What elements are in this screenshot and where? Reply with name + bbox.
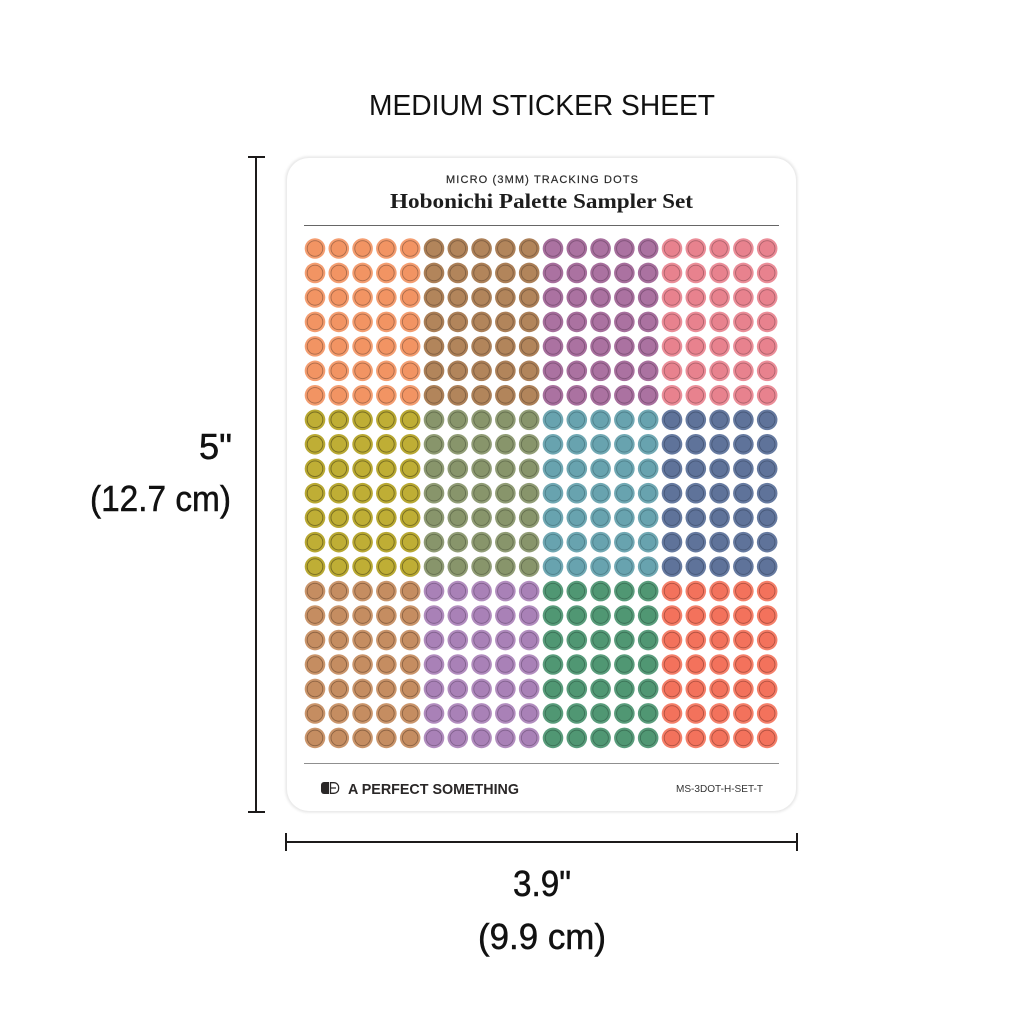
dots: green — [543, 581, 658, 748]
width label: 3.9" — [513, 863, 571, 904]
dots: teal — [543, 410, 658, 577]
panel: sticker sheet — [286, 156, 798, 812]
width label — [478, 863, 606, 957]
dots: lilac — [424, 581, 539, 748]
width label: (9.9 cm) — [478, 916, 606, 957]
sheet subtitle: MICRO (3MM) TRACKING DOTS — [446, 174, 638, 186]
dots: olive — [305, 410, 420, 577]
dots: pink — [662, 238, 777, 406]
heading: medium sticker sheet: MEDIUM STICKER SHEET — [369, 90, 715, 122]
top rule — [304, 225, 779, 226]
icon: brand logo — [321, 782, 339, 794]
bottom rule — [304, 763, 779, 764]
dots: sage — [424, 410, 539, 577]
dot grid — [305, 238, 777, 748]
dots: tan — [305, 581, 420, 748]
sheet title: Hobonichi Palette Sampler Set — [390, 189, 693, 213]
dots: brown — [424, 238, 539, 406]
dots: coral — [662, 581, 777, 748]
dots: navy — [662, 410, 777, 577]
height label: (12.7 cm) — [90, 478, 231, 519]
dots: purple — [543, 238, 658, 406]
brand name: A PERFECT SOMETHING — [348, 781, 519, 798]
product code: MS-3DOT-H-SET-T — [676, 783, 764, 795]
width dimension line — [285, 833, 798, 851]
height dimension line — [248, 156, 265, 813]
height label — [90, 426, 232, 519]
dots: orange — [305, 238, 420, 406]
height label: 5" — [199, 426, 232, 467]
